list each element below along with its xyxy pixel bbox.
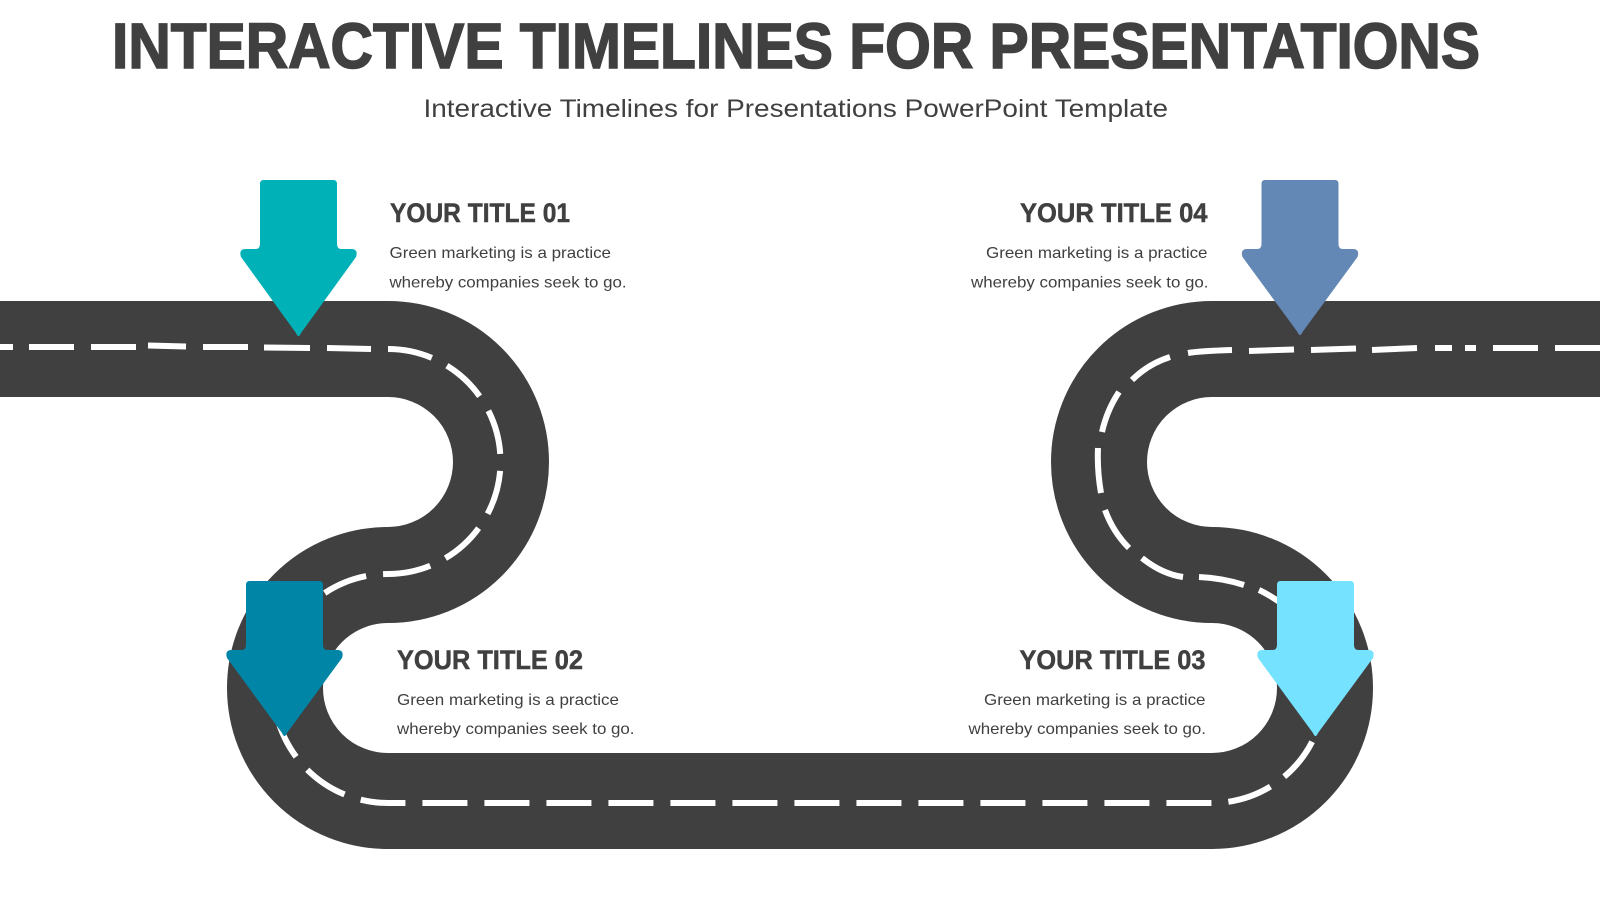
- text block 03: [967, 645, 1206, 738]
- body 02: whereby companies seek to go.: [396, 721, 634, 738]
- body 03: Green marketing is a practice: [984, 692, 1206, 709]
- heading 03: YOUR TITLE 03: [1020, 645, 1206, 675]
- body 01: whereby companies seek to go.: [388, 274, 626, 292]
- title: INTERACTIVE TIMELINES FOR PRESENTATIONS: [112, 10, 1480, 82]
- road centre dashes: [0, 346, 1600, 803]
- road surface: [0, 349, 1600, 801]
- text block 02: [396, 645, 634, 738]
- text block 01: [388, 198, 626, 292]
- arrow 02: [226, 581, 343, 736]
- body 04: [970, 245, 1208, 292]
- body 04: Green marketing is a practice: [986, 245, 1208, 262]
- winding road timeline: [0, 346, 1600, 803]
- arrow 01: [240, 180, 357, 336]
- arrow 03: [1257, 581, 1374, 736]
- body 03: [967, 692, 1206, 738]
- body 03: whereby companies seek to go.: [967, 721, 1206, 738]
- body 01: Green marketing is a practice: [390, 245, 611, 262]
- heading 04: YOUR TITLE 04: [1020, 198, 1208, 228]
- subtitle: Interactive Timelines for Presentations PowerPoint Template: [424, 95, 1168, 123]
- heading 02: YOUR TITLE 02: [397, 645, 583, 675]
- arrow 04: [1242, 180, 1358, 335]
- text block 04: [970, 198, 1208, 292]
- heading 01: YOUR TITLE 01: [390, 198, 570, 228]
- body 01: [388, 245, 626, 292]
- body 04: whereby companies seek to go.: [970, 274, 1208, 292]
- body 02: [396, 692, 634, 738]
- body 02: Green marketing is a practice: [397, 692, 619, 709]
